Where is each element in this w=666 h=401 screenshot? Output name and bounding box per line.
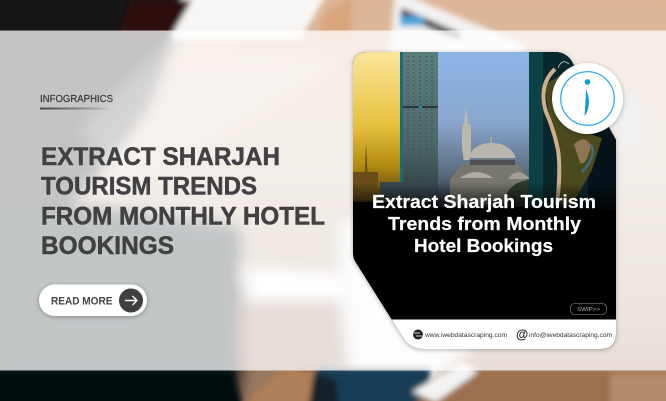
website contact: www.iwebdatascraping.com: [424, 332, 507, 339]
label: infographics: INFOGRAPHICS: [40, 93, 113, 105]
card title: Trends from Monthly: [388, 214, 581, 234]
label: infographics: [40, 93, 113, 110]
panel: card: [353, 52, 616, 350]
heading: [41, 143, 325, 260]
heading: BOOKINGS: [41, 232, 174, 260]
heading: TOURISM TRENDS: [41, 172, 257, 200]
footer strip: [392, 320, 616, 349]
photo: mosque: [438, 52, 530, 207]
photo: tower: [380, 52, 438, 202]
heading: EXTRACT SHARJAH: [41, 143, 280, 171]
website contact: [413, 330, 507, 340]
swipe badge: [570, 304, 606, 314]
swipe badge: SWIP>>: [577, 307, 600, 313]
logo badge: [552, 63, 623, 134]
card title: Hotel Bookings: [414, 236, 553, 256]
icon: globe: [413, 330, 423, 340]
button: read more: READ MORE: [51, 296, 112, 308]
email contact: info@iwebdatascraping.com: [529, 332, 612, 339]
card title: Extract Sharjah Tourism: [372, 192, 596, 212]
icon: arrow: [119, 288, 143, 312]
gradient overlay: [353, 182, 616, 252]
photo: island: [529, 52, 616, 210]
button: read more: [39, 284, 147, 316]
card title: [372, 192, 596, 256]
heading: FROM MONTHLY HOTEL: [41, 202, 325, 230]
email contact: @: [516, 328, 528, 342]
email contact: [516, 328, 612, 342]
photo: yellow skyline: [353, 52, 400, 202]
